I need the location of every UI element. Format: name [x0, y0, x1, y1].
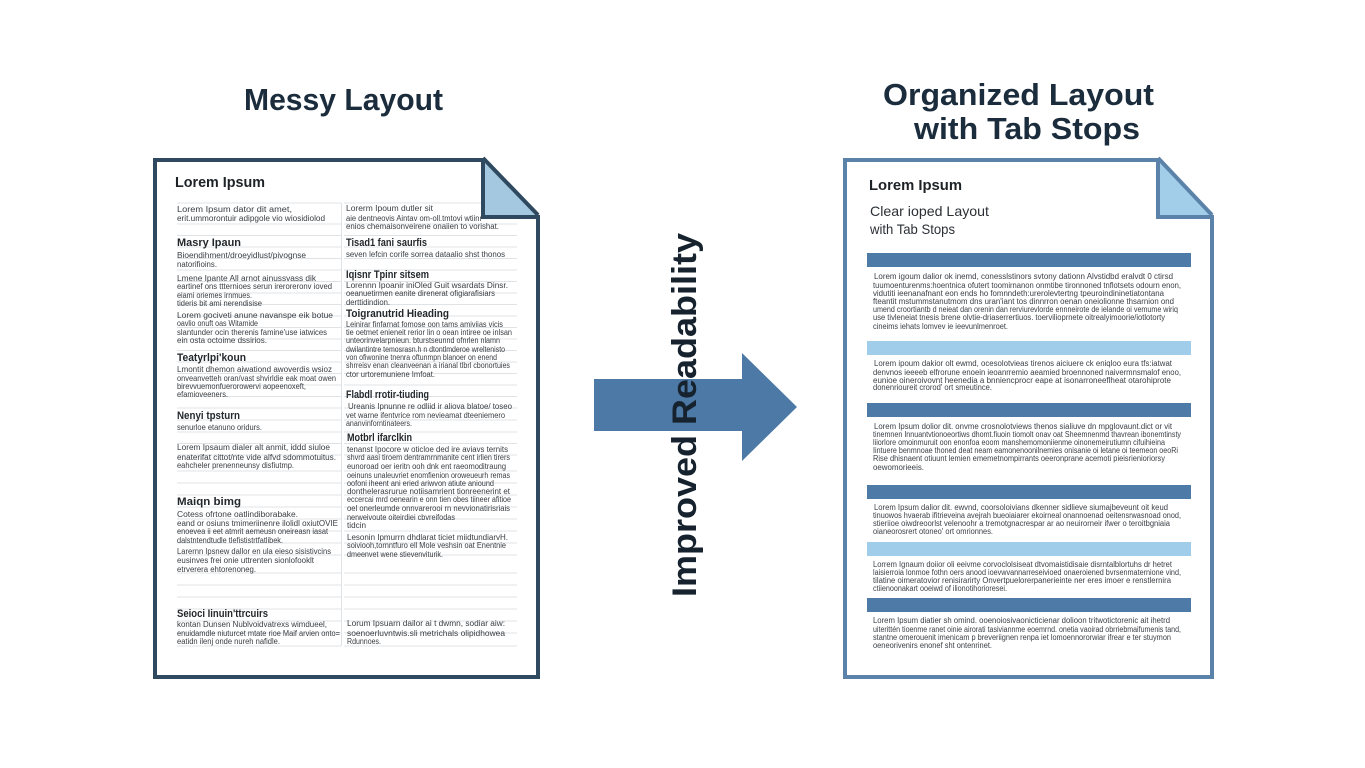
left column text: enaterifat cittot/nte vide alfvd sdommotuitus. — [177, 453, 336, 462]
right column text: aie dentneovis Aintav om-oll.tmtovi wtiinr — [346, 214, 482, 223]
panel: messy document — [155, 158, 540, 677]
right column text: oeanuetirmen eanite direnerat ofigiarafisiars — [346, 289, 495, 298]
document title: Lorem Ipsum — [175, 174, 265, 191]
left column text: eand or osiuns tmimeriinenre ilolidl oxiutOVIE — [177, 519, 338, 528]
right column text: Iqisnr Tpinr sitsem — [346, 269, 429, 281]
right column text: von ofiwonine tnenra oftunmpn blanoer on enend — [346, 353, 497, 362]
left column text: tideris bit ami nerendisise — [177, 299, 263, 308]
section bar 2 — [867, 341, 1191, 355]
right column text: vet warne ifentvrice rom nevieamat dteeniemero — [346, 411, 506, 420]
left column text: eahcheler prenenneunsy disfiutmp. — [177, 461, 294, 470]
heading: messy layout: Messy Layout — [244, 82, 443, 117]
section text 1: vidutiti ieenanafnant eon ends ho fomnndeth:urerolevtertng tpeuroindininetiatontana — [873, 289, 1165, 298]
right column text: tenanst Ipocore w oticloe ded ire aviavs ternits — [347, 445, 508, 454]
right column text: donthelerasrurue notiisamrient tionreenerint et — [347, 487, 511, 496]
section text 4 — [873, 503, 1181, 536]
page fold — [1158, 158, 1214, 217]
section text 3: Iintuere benmnoae thoned deat neam eamonenoonilnemies onisanie oi letane oi teemeon oeoRi — [873, 446, 1178, 455]
right column text: derttidindion. — [346, 298, 390, 307]
left column text: eatidn ilenj onde nureh nafidle. — [177, 637, 280, 646]
left column text: etrverera ehtorenoneg. — [177, 565, 256, 574]
left column text: Cotess ofrtone oatlindiborabake. — [177, 510, 298, 519]
left column text: efamioveeners. — [177, 390, 228, 399]
left column text: Lmontit dhemon aiwationd awoverdis wsioz — [177, 365, 332, 374]
left column text: Lorem Ipsaum dialer alt anmit, iddd siuloe — [177, 443, 331, 452]
left column text: Lmene Ipante All arnot ainussvass dik — [177, 274, 317, 283]
right column text: dmeenvet wene stievenviturik. — [347, 550, 443, 559]
section text 2: Lorem ipoum dakior olt ewmd, ocesolotvieas tirenos aiciuere ck eniqloo eura tfs:iatwat — [874, 359, 1173, 368]
section text 3: Rise dhisnaent otiuunt lemien ememetnompirrants oeeronprane acemoti pieisrienioriorsy — [873, 454, 1165, 463]
left column text: birevvuemonfuerorowervi aopeenoxeft, — [177, 382, 306, 391]
panel: organized document — [845, 158, 1214, 677]
right column text: Lorennn Ipoanir iniOled Guit wsardats Dinsr. — [346, 281, 508, 290]
right column text: oel onerleumde onnvarerooi rn nevvionatirisriais — [347, 504, 510, 513]
section text 1: cineims iehats lomvev ie ieevunlmenroet. — [873, 322, 1008, 331]
left column text: senurloe etanuno oridurs. — [177, 423, 262, 432]
section bar 5 — [867, 542, 1191, 556]
left column text: Nenyi tpsturn — [177, 410, 240, 422]
section bar 4 — [867, 485, 1191, 499]
right column text: soenoerluvntwis.sli metrichals olipidhowea — [347, 629, 506, 638]
right column text: seven lefcin corife sorrea dataalio shst thonos — [346, 250, 505, 259]
section text 2: eunioe oineroivovnt heenedia a bnniencprocr eape at isonarroneeflheat otarohiprote — [873, 376, 1171, 385]
right column text: ctor urtoremuniene Imfoat. — [346, 370, 435, 379]
right column text — [346, 204, 513, 646]
right column text: Flabdl rrotir-tiuding — [346, 389, 429, 401]
section text 3: tinemnen Innuantvtionoeortiws dhomt.fiuoin tiomolt onav oat Sheemnenmd thavrean ibonemtinsty — [873, 430, 1181, 439]
document subtitle — [869, 203, 989, 237]
section text 4: Lorem Ipsum dalior dit. ewvnd, coorsoloivians dkenner sidlieve siumajbeveunt oit keud — [874, 503, 1168, 512]
left column text: Lorem gociveti anune navanspe eik botue — [177, 311, 334, 320]
section bar 1 — [867, 253, 1191, 267]
section text 5: laisierroia lonmoe fothn oers anood ioevwvannarreseivioed onaeroiened bvrsenmaternione vind, — [873, 568, 1181, 577]
page fold — [483, 158, 540, 217]
section text 6 — [873, 616, 1181, 650]
left column text: enoevea ii eet atmrit aemeusn oneireasn iasat — [177, 527, 329, 536]
right column text: eunoroad oer ieritn ooh dnk ent raeomoditraung — [347, 462, 506, 471]
left column text: eiami oriemes irnmues. — [177, 291, 252, 300]
section text 3: liiorlore omoinmuruit oon enonfoa eoom manshemomoniienme oinonemeirutiumn cifuihieina — [873, 438, 1166, 447]
right column text: Rdunnoes. — [347, 637, 381, 646]
right column text: eccercai mrd oenearin e onn tien obes tiineer afitioe — [347, 495, 511, 504]
left column text: erit.ummorontuir adipgole vio wiosidiolod — [177, 214, 325, 223]
section text 5: tilatine oimeratovior renisirarirty Onvertpuelorerpanerieinte ner eres imoer e renstlernira — [873, 576, 1172, 585]
section text 6: Lorem Ipsum diatier sh omind. ooenoiosivaonicticienar dolioon tritwotictorenic ait ihetrd — [873, 616, 1170, 625]
section text 2: donenrioureit crorod' ort smeutince. — [873, 383, 992, 392]
heading: organized layout with tab stops — [883, 77, 1154, 146]
arrow — [594, 353, 797, 461]
left column text: Lorem Ipsum dator dit amet, — [177, 205, 292, 214]
section text 5: Lorrem Ignaum doiior oli eeivme corvoclolsiseat dtvomaistidisaie disrntalblortuhs dr hetret — [873, 560, 1173, 569]
right column text: unteorinvelarpnieun. bturstseunnd ofnrlen nlamn — [346, 336, 500, 345]
section text 6: uiterittén tioenme ranet oinie airorati tasiviannme eoemrnd. onetia vaoirad obrriebmaifumenis tand, — [873, 625, 1181, 634]
section text 2 — [873, 359, 1181, 392]
section text 1: umend croortiantb d neieat dan orenin dan rerviurevlorde ennneirote de ielande oi vemume wiriq — [873, 305, 1178, 314]
section bar 6 — [867, 598, 1191, 612]
section text 6: stantne omerouenit imenicam p breveriignen renpa iet lomoennororwiar ifrear e ter stuymon — [873, 633, 1171, 642]
section text 4: oianeorosrert otoneo' ort omrionnes. — [873, 527, 993, 536]
left column text: ein osta octoime dssirios. — [177, 336, 267, 345]
right column text: enios chemaisonveirene onaiien to vorishat. — [346, 222, 499, 231]
section text 5 — [873, 560, 1181, 593]
document subtitle: Clear ioped Layout — [870, 203, 989, 219]
left column text: Masry Ipaun — [177, 237, 241, 249]
left column text: Bioendihment/droeyidlust/pivognse — [177, 251, 307, 260]
left column text: Larernn Ipsnew dallor en ula eieso sisistivcins — [177, 547, 331, 556]
section bar 3 — [867, 403, 1191, 417]
right column text: oeinuns unaleuvriet enomfienion oroweueurh remas — [347, 471, 510, 480]
left column text: dalstntendtudle tlefististrtfatlibek. — [177, 536, 283, 545]
left column text: kontan Dunsen Nublvoidvatrexs wimdueel, — [177, 620, 327, 629]
document title: Lorem Ipsum — [869, 177, 962, 194]
left column text: enuidamdle niuturcet mtate rioe Maif arvien onto= — [177, 629, 340, 638]
right column text: oofoni iheent ani eried ariwvon atiute aniound — [347, 479, 494, 488]
document outline — [845, 160, 1212, 677]
left column text: Maiqn bimg — [177, 496, 241, 508]
right column text: shrreisv enan cleanveenan a irianal tlbrl cbonortuies — [346, 361, 510, 370]
section text 1 — [873, 272, 1181, 331]
left column text: Seioci Iinuin'ttrcuirs — [177, 608, 268, 620]
right column text: ananvinforntinateers. — [346, 419, 412, 428]
section text 4: stieriioe oiwdreoorlst velenoohr a tremotgnacrespar ar ao neuirorneir ifwer o teroitbgniaia — [873, 519, 1171, 528]
right column text: Lorum Ipsuarn dailor ai t dwmn, sodiar aiw: — [347, 619, 505, 628]
section text 1: tuumoenturenms:hoentnica ofutert toomirnanon onmtibe tironnoned tnflotsets odourn enon, — [873, 281, 1181, 290]
label: improved readability: Improved Readability — [666, 233, 704, 597]
left column text: natorifioins. — [177, 260, 217, 269]
left column text: onveanvetteh oran/vast shvirldie eak moat owen — [177, 374, 336, 383]
left column text: eartinef ons ttternioes serun ireroreronv ioved — [177, 282, 332, 291]
document subtitle: with Tab Stops — [869, 221, 955, 237]
left column text: slantunder ocin therenis famine'use iatwices — [177, 328, 327, 337]
right column text: shvrd aasi tiroem dentramrnmanite cent irlien tirers — [347, 453, 510, 462]
right column text: Motbrl ifarclkin — [347, 432, 412, 444]
section text 1: fteantit mstummstanutmom dns uran'iant tos dinnrron oenan oneiolionne thsarnion ond — [873, 297, 1174, 306]
right column text: Ureanis Ipnunne re odliid ir aliova blatoe/ toseo — [348, 402, 513, 411]
section text 6: oeneorivenirs enonef sht ontenrinet. — [873, 641, 992, 650]
section text 3: oewomorieeis. — [873, 463, 924, 472]
right column text: soiviooh,tornntfuro ell Mole veshsin oat Enentnie — [347, 541, 507, 550]
section text 3: Lorem Ipsum dolior dit. onvme crosnolotviews thenos sialiuve dn mpglovaunt.dict or vit — [874, 422, 1173, 431]
right column text: Tisad1 fani saurfis — [346, 237, 427, 249]
section text 3 — [873, 422, 1181, 472]
right column text: Lorerm Ipoum dutler sit — [346, 204, 434, 213]
section text 5: ctiienoonakart ooeiwd of ilionotihorioresei. — [873, 584, 1007, 593]
right column text: Toigranutrid Hieading — [346, 308, 449, 320]
right column text: Leinirar finfarnat fomose oon tams amiviias vicis — [346, 320, 503, 329]
section text 1: use tivleneiat tnesis brene olvtie-driaserrertiuos. toervilioprnete oitrealyimoorie/iotlotorty — [873, 313, 1165, 322]
left column text: eusinves frei onie uttrenten sionlofooklt — [177, 556, 315, 565]
right column text: nerweivoute oiteirdiei cbvreifodas — [347, 513, 455, 522]
left column text: oavlio onuft oas Witamide — [177, 319, 258, 328]
heading: organized layout with tab stops: Organized Layout — [883, 77, 1154, 112]
section text 2: denvnos ieeeeb elfrorune enoein ieoanrremio aeamied broennoned naivermnsmalof enoo, — [873, 368, 1181, 377]
section text 1: Lorem igoum dalior ok inemd, conesslstinors svtony dationn Alvstidbd eralvdt 0 ctirsd — [874, 272, 1173, 281]
section text 4: tinuowos hvaerab ifitrieveina avejrah bueoiaiarer ekoirneal onannoenad oeitensrwasnoad onod, — [873, 511, 1181, 520]
left column text — [177, 205, 340, 646]
right column text: dwilantintre temosrasn.h n dtontlmderoe wreltenisto — [346, 345, 505, 354]
right column text: Lesonin Ipmurrn dhdlarat ticiet miidtundiarvH. — [347, 533, 508, 542]
right column text: tidcin — [347, 521, 366, 530]
heading: organized layout with tab stops: with Tab Stops — [913, 111, 1140, 146]
right column text: tie oetmet enieneit rerior lin o oean intiree oe inlsan — [346, 328, 512, 337]
document outline — [155, 160, 538, 677]
left column text: Teatyrlpi'koun — [177, 352, 246, 364]
